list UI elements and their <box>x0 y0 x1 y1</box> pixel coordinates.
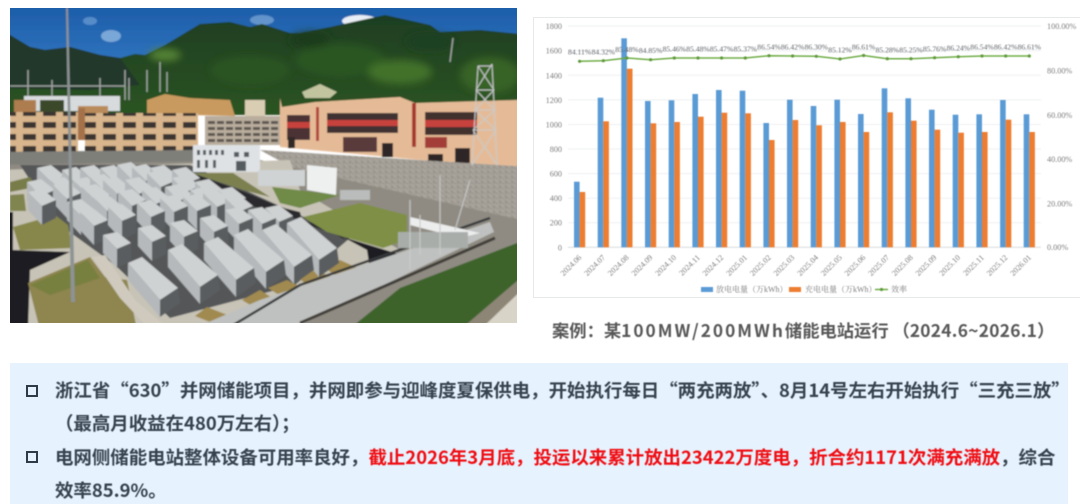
right axis labels: 0.00% <box>1047 243 1068 252</box>
x axis month labels: 2025.06 <box>843 253 867 278</box>
x axis month labels: 2025.03 <box>772 253 796 278</box>
right axis labels: 60.00% <box>1047 111 1072 120</box>
left axis labels: 200 <box>550 219 562 228</box>
efficiency data labels: 85.25% <box>899 46 923 54</box>
left axis labels: 1200 <box>546 96 562 105</box>
left axis labels: 1800 <box>546 22 562 31</box>
efficiency data labels: 86.61% <box>852 42 876 52</box>
mountains <box>0 15 530 115</box>
efficiency data labels: 84.11% <box>568 48 592 56</box>
left axis labels: 600 <box>550 170 562 179</box>
x axis month labels: 2024.11 <box>677 253 702 278</box>
x axis month labels: 2025.07 <box>866 253 891 278</box>
white wall <box>410 217 480 238</box>
tall light pole <box>66 8 75 302</box>
pale road corner <box>486 294 517 323</box>
discharge bars <box>574 38 1029 247</box>
efficiency data labels: 86.42% <box>781 42 805 52</box>
x axis month labels: 2025.09 <box>914 253 938 278</box>
white control building <box>193 145 260 172</box>
legend: 放电电量（万kWh） <box>716 284 788 294</box>
left axis labels: 1400 <box>546 71 562 80</box>
x axis month labels: 2024.10 <box>653 253 678 278</box>
efficiency data labels: 86.54% <box>970 42 994 52</box>
chart caption: 案例：某100MW/200MWh储能电站运行 （2024.6~2026.1） <box>552 317 1054 342</box>
panel: chart frame <box>533 17 1080 298</box>
legend <box>701 284 907 294</box>
concrete ground <box>0 160 400 330</box>
x axis month labels: 2024.06 <box>559 253 583 278</box>
efficiency data labels: 85.48% <box>615 45 639 54</box>
asphalt road <box>10 211 70 323</box>
efficiency data labels: 85.37% <box>734 44 758 54</box>
lattice pylon <box>410 64 497 270</box>
efficiency data labels: 85.12% <box>828 46 852 54</box>
container field base <box>20 165 350 318</box>
efficiency data labels: 86.24% <box>947 44 971 52</box>
panel: key points <box>10 363 1068 504</box>
efficiency data labels: 84.32% <box>592 48 616 56</box>
x axis month labels: 2025.01 <box>724 253 749 278</box>
right axis labels <box>1047 22 1077 252</box>
legend: 充电电量（万kWh） <box>805 284 877 294</box>
x axis month labels: 2025.05 <box>819 253 844 278</box>
substation gantries <box>10 38 453 100</box>
left axis labels <box>546 22 562 252</box>
grass patches <box>13 215 72 250</box>
right axis labels: 20.00% <box>1047 200 1072 208</box>
efficiency data labels: 85.48% <box>686 44 710 54</box>
right axis labels: 100.00% <box>1047 22 1077 31</box>
far white hall <box>24 96 120 111</box>
efficiency data labels: 85.47% <box>710 44 734 54</box>
point 2 text line 2: 效率85.9%。 <box>55 477 167 503</box>
left axis labels: 1600 <box>546 47 562 56</box>
x axis month labels <box>559 253 1033 278</box>
combo chart: discharge and charge bars with efficiency line <box>546 22 1077 294</box>
sky <box>10 8 517 59</box>
efficiency data labels: 86.61% <box>1018 42 1042 52</box>
perimeter wall <box>10 149 194 166</box>
efficiency data labels: 84.85% <box>639 46 663 55</box>
efficiency data labels: 85.76% <box>923 44 947 54</box>
x axis month labels: 2025.08 <box>890 253 915 278</box>
orange back buildings <box>147 94 235 116</box>
x axis month labels: 2024.08 <box>606 253 631 278</box>
x axis month labels: 2025.12 <box>985 253 1010 278</box>
right axis labels: 40.00% <box>1047 155 1072 164</box>
x axis month labels: 2025.04 <box>795 253 820 278</box>
x axis month labels: 2025.10 <box>937 253 962 278</box>
efficiency data labels: 86.30% <box>805 42 829 52</box>
charge bars <box>580 69 1035 247</box>
left axis labels: 1000 <box>546 120 562 130</box>
efficiency data labels: 86.54% <box>757 42 781 52</box>
x axis month labels: 2025.02 <box>748 253 773 278</box>
brown plots beside containers <box>194 260 356 322</box>
battery containers <box>27 162 339 317</box>
left axis labels: 400 <box>550 194 562 203</box>
left office buildings <box>10 112 78 152</box>
left axis labels: 0 <box>558 243 562 252</box>
x axis month labels: 2024.12 <box>701 253 725 278</box>
efficiency data labels: 85.46% <box>663 44 687 54</box>
efficiency data labels: 85.28% <box>876 46 900 54</box>
ground base <box>0 160 530 330</box>
right axis labels: 80.00% <box>1047 66 1072 76</box>
point 1 text line 1: 浙江省“630”并网储能项目，并网即参与迎峰度夏保供电，开始执行每日“两充两放”、8月14号左右开始执行“三充三放” <box>55 377 1070 403</box>
x axis month labels: 2024.07 <box>582 253 607 278</box>
large main building <box>280 97 530 170</box>
point 1 text line 2: （最高月收益在480万左右）； <box>55 410 300 436</box>
green hedge <box>356 242 517 323</box>
efficiency line <box>578 54 1031 63</box>
perimeter fence <box>208 222 494 323</box>
efficiency data labels: 86.42% <box>994 42 1018 52</box>
efficiency data labels <box>568 42 1042 56</box>
light transformer hall <box>307 165 337 195</box>
bullet icon 2 <box>26 451 38 463</box>
legend: 效率 <box>891 284 907 294</box>
photo: energy storage station in mountain valley <box>10 8 517 323</box>
x axis month labels: 2025.11 <box>961 253 986 278</box>
left axis labels: 800 <box>550 145 562 154</box>
point 2 text line 1: 电网侧储能电站整体设备可用率良好，截止2026年3月底，投运以来累计放出23422万度电，折合约1171次满充满放，综合 <box>55 444 1055 470</box>
concrete path <box>101 254 135 313</box>
bullet icon 1 <box>26 385 38 397</box>
x axis month labels: 2024.09 <box>630 253 654 278</box>
x axis month labels: 2026.01 <box>1008 253 1033 278</box>
